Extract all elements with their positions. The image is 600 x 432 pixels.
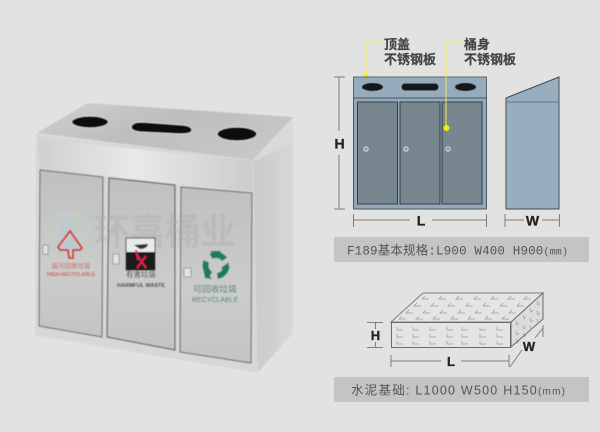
callout label: lid material: 顶盖 — [384, 37, 410, 52]
lid — [354, 77, 486, 98]
callout label: lid material — [363, 37, 436, 80]
label: harmful waste — [117, 269, 165, 289]
label: red category: 高可回收垃圾 — [52, 261, 91, 270]
label: red category: HIGH-RECYCLABLE — [47, 272, 96, 278]
concrete base diagram — [391, 293, 543, 348]
doors — [358, 102, 482, 204]
door: middle — [107, 178, 175, 350]
label: harmful waste: 有害垃圾 — [126, 269, 156, 279]
base dimension: L — [391, 354, 509, 369]
base dimension: H: H — [371, 328, 380, 343]
watermark — [44, 210, 236, 254]
base dimension: H — [367, 322, 383, 348]
door: left — [39, 170, 103, 337]
label: recyclable: 可回收垃圾 — [193, 283, 237, 294]
label: recyclable — [192, 283, 238, 304]
base texture — [397, 296, 540, 344]
base side — [511, 293, 543, 347]
body — [354, 98, 486, 209]
dimension: H: H — [334, 136, 345, 152]
caption: product size — [334, 237, 589, 262]
base dimension: W: W — [523, 339, 536, 354]
openings — [362, 83, 476, 91]
dimension: L: L — [417, 212, 426, 228]
dimension: W — [505, 212, 560, 228]
label: harmful waste: HARMFUL WASTE — [117, 283, 165, 289]
label: red category — [47, 261, 96, 278]
callout label: body material: 桶身 — [464, 37, 490, 52]
base top — [391, 293, 543, 322]
product photo: stainless steel recycling bin — [35, 103, 293, 372]
dimension: W: W — [526, 212, 540, 228]
base front — [392, 322, 510, 348]
callout label: body material: 不锈钢板 — [464, 52, 516, 67]
door handles — [364, 147, 450, 151]
front view diagram — [354, 77, 486, 209]
callout label: body material — [444, 37, 516, 131]
lid slanted right edge — [253, 117, 293, 160]
bin side panel — [252, 117, 293, 372]
dimension: L — [354, 212, 486, 228]
dimension: H — [334, 77, 345, 209]
icon: red recyclable arrow — [58, 231, 82, 258]
caption: base size: 水泥基础: L1000 W500 H150(mm) — [351, 384, 565, 398]
bin openings — [72, 116, 257, 141]
base dimension: W — [510, 325, 543, 367]
bin lid — [37, 103, 293, 160]
door locks — [43, 245, 191, 277]
callout label: lid material: 不锈钢板 — [384, 52, 436, 67]
icon: green recycling symbol — [203, 251, 229, 279]
door: right — [180, 187, 252, 363]
label: recyclable: RECYCLABLE — [192, 297, 238, 304]
icon: harmful waste — [126, 238, 155, 270]
bin front frame — [35, 134, 258, 372]
base dimension: L: L — [447, 354, 455, 369]
caption: product size: F189基本规格:L900 W400 H900(mm) — [347, 242, 568, 258]
side view diagram — [506, 77, 559, 209]
watermark: 环嘉桶业 — [94, 211, 236, 252]
caption: base size — [334, 377, 589, 402]
upper front band — [38, 139, 252, 192]
